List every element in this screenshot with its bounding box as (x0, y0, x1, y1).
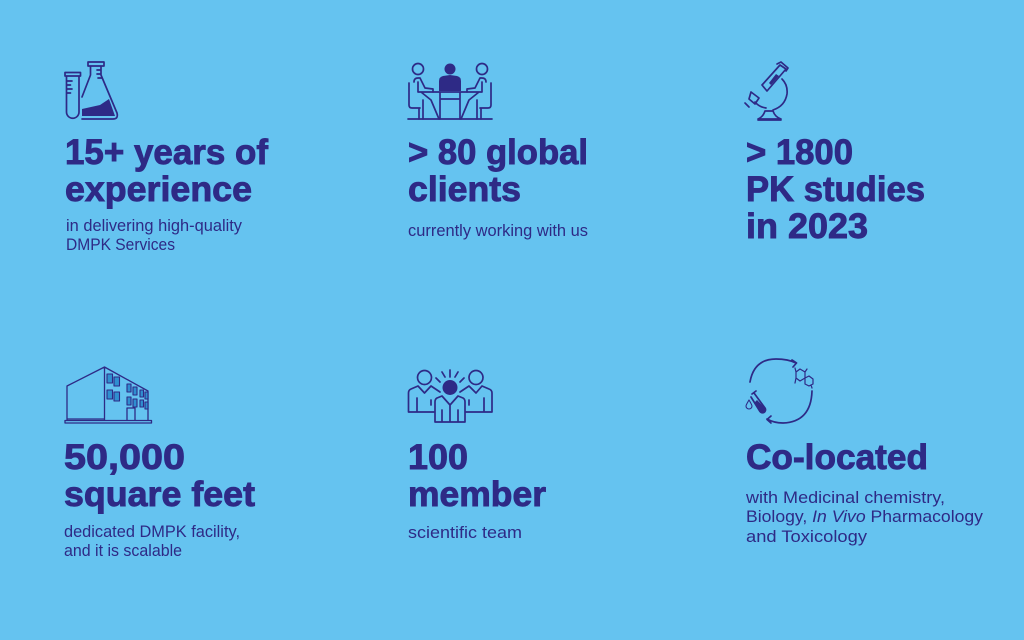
text: dedicated DMPK facility, and it is scalable: and it is scalable (64, 542, 182, 560)
text: dedicated DMPK facility, and it is scalable (64, 523, 240, 560)
icon: cycle with molecule and test tube (746, 359, 813, 423)
heading: 50,000 square feet: square feet (64, 475, 255, 514)
heading: > 1800 PK studies in 2023: > 1800 (746, 133, 853, 172)
heading: 100 member: member (408, 475, 546, 514)
heading: 100 member (408, 438, 546, 514)
heading: 15+ years of experience (65, 133, 268, 209)
text: with Medicinal chemistry, Biology, In Vivo Pharmacology and Toxicology: with Medicinal chemistry, (745, 489, 945, 507)
icon: microscope (745, 62, 788, 120)
heading: 15+ years of experience: experience (65, 170, 252, 209)
text: dedicated DMPK facility, and it is scalable: dedicated DMPK facility, (64, 523, 240, 541)
panel: years of experience (65, 62, 268, 254)
heading: > 80 global clients (408, 133, 588, 209)
panel: team (408, 370, 546, 542)
heading: > 1800 PK studies in 2023: PK studies (746, 170, 925, 209)
text: with Medicinal chemistry, Biology, In Vivo Pharmacology and Toxicology (745, 489, 984, 546)
icon: team of three with light bulb (408, 370, 492, 422)
heading: 50,000 square feet: 50,000 (64, 438, 185, 477)
icon: three people at a table (408, 64, 492, 119)
text: in delivering high-quality DMPK Services: DMPK Services (66, 236, 175, 254)
heading: 15+ years of experience: 15+ years of (65, 133, 268, 172)
heading: > 80 global clients: clients (408, 170, 521, 209)
panel: co-located (745, 359, 984, 546)
heading: > 1800 PK studies in 2023: in 2023 (746, 207, 868, 246)
heading: 50,000 square feet (64, 438, 255, 514)
text: currently working with us: currently working with us (408, 222, 588, 240)
text: scientific team: scientific team (408, 524, 522, 542)
heading: > 1800 PK studies in 2023 (746, 133, 925, 246)
heading: 100 member: 100 (408, 438, 468, 477)
icon: test tube and flask (65, 62, 117, 119)
icon: building (65, 367, 152, 423)
heading: > 80 global clients: > 80 global (408, 133, 588, 172)
panel: facility (64, 367, 255, 560)
panel: PK studies (745, 62, 925, 246)
text: with Medicinal chemistry, Biology, In Vivo Pharmacology and Toxicology: and Toxicology (746, 528, 868, 546)
text: with Medicinal chemistry, Biology, In Vivo Pharmacology and Toxicology: Biology, In Vivo Pharmacology (746, 508, 984, 526)
panel: global clients (408, 64, 588, 240)
heading: Co-located: Co-located (746, 438, 928, 477)
text: in delivering high-quality DMPK Services (66, 217, 243, 254)
text: in delivering high-quality DMPK Services: in delivering high-quality (66, 217, 243, 235)
